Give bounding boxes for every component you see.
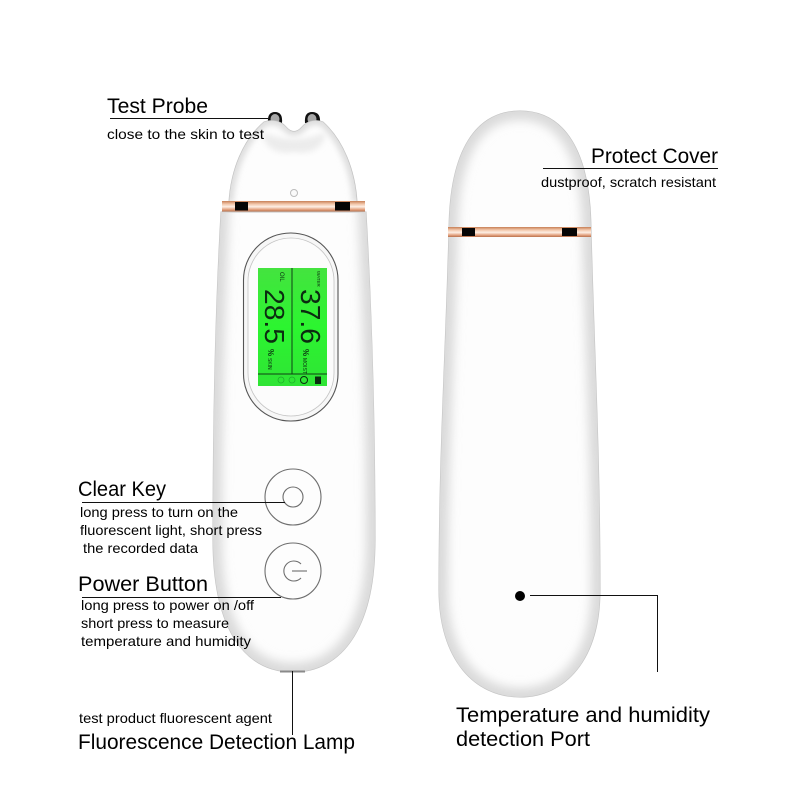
display bezel xyxy=(244,233,338,421)
callout: power button: short press to measure xyxy=(81,615,229,631)
callout: protect cover: Protect Cover xyxy=(591,145,718,168)
left device: analyzer xyxy=(213,112,375,672)
LCD screen: % xyxy=(266,349,275,356)
fluorescence lamp xyxy=(280,670,305,672)
icon: probe nubs xyxy=(268,112,320,124)
callout: clear key: fluorescent light, short press xyxy=(80,522,262,538)
shell rim shading xyxy=(439,111,600,697)
callout: power button: temperature and humidity xyxy=(81,633,251,649)
small labels: OIL xyxy=(278,272,284,282)
callout: power button: long press to power on /off xyxy=(81,597,254,613)
callout: protect cover xyxy=(541,145,718,190)
device head xyxy=(229,121,357,202)
callout: clear key: long press to turn on the xyxy=(80,504,238,520)
LCD screen: WATER xyxy=(316,271,321,287)
body rim shading xyxy=(213,190,375,672)
callout: test probe: Test Probe xyxy=(107,95,208,118)
rose gold ring xyxy=(448,227,591,237)
callout: power button: Power Button xyxy=(78,573,208,596)
left reading: 28.5 xyxy=(259,289,290,344)
callout: power button xyxy=(78,573,281,649)
callout: fluorescence detection lamp: test product fluorescent agent xyxy=(79,710,272,726)
port dot xyxy=(515,591,525,601)
callout: test probe xyxy=(107,95,268,142)
callout: temperature and humidity port: detection Port xyxy=(456,728,590,751)
LCD screen: MOIST xyxy=(301,358,307,374)
right device: protect cover view xyxy=(439,111,658,697)
LCD screen: SKIN xyxy=(266,358,272,370)
callout: temperature and humidity port xyxy=(456,704,711,751)
callout: test probe: close to the skin to test xyxy=(107,126,264,142)
callout: fluorescence detection lamp xyxy=(78,671,355,754)
power button xyxy=(265,543,321,599)
callout: clear key: the recorded data xyxy=(83,540,198,556)
rose gold ring xyxy=(222,201,365,212)
callout: fluorescence detection lamp: Fluorescence Detection Lamp xyxy=(78,731,355,754)
LCD screen xyxy=(258,268,327,386)
LCD screen: % xyxy=(301,349,310,356)
callout: protect cover: dustproof, scratch resistant xyxy=(541,174,716,190)
clear key button xyxy=(265,469,321,525)
callout: clear key: Clear Key xyxy=(78,478,166,501)
right reading: 37.6 xyxy=(295,289,326,344)
device shell xyxy=(439,111,600,697)
sensor hole xyxy=(290,190,298,196)
port leader line xyxy=(530,596,658,672)
head shading xyxy=(229,121,357,202)
device body xyxy=(213,212,375,672)
callout: clear key xyxy=(78,478,285,556)
battery and status icons xyxy=(300,376,308,384)
callout: temperature and humidity port: Temperature and humidity xyxy=(456,704,711,727)
